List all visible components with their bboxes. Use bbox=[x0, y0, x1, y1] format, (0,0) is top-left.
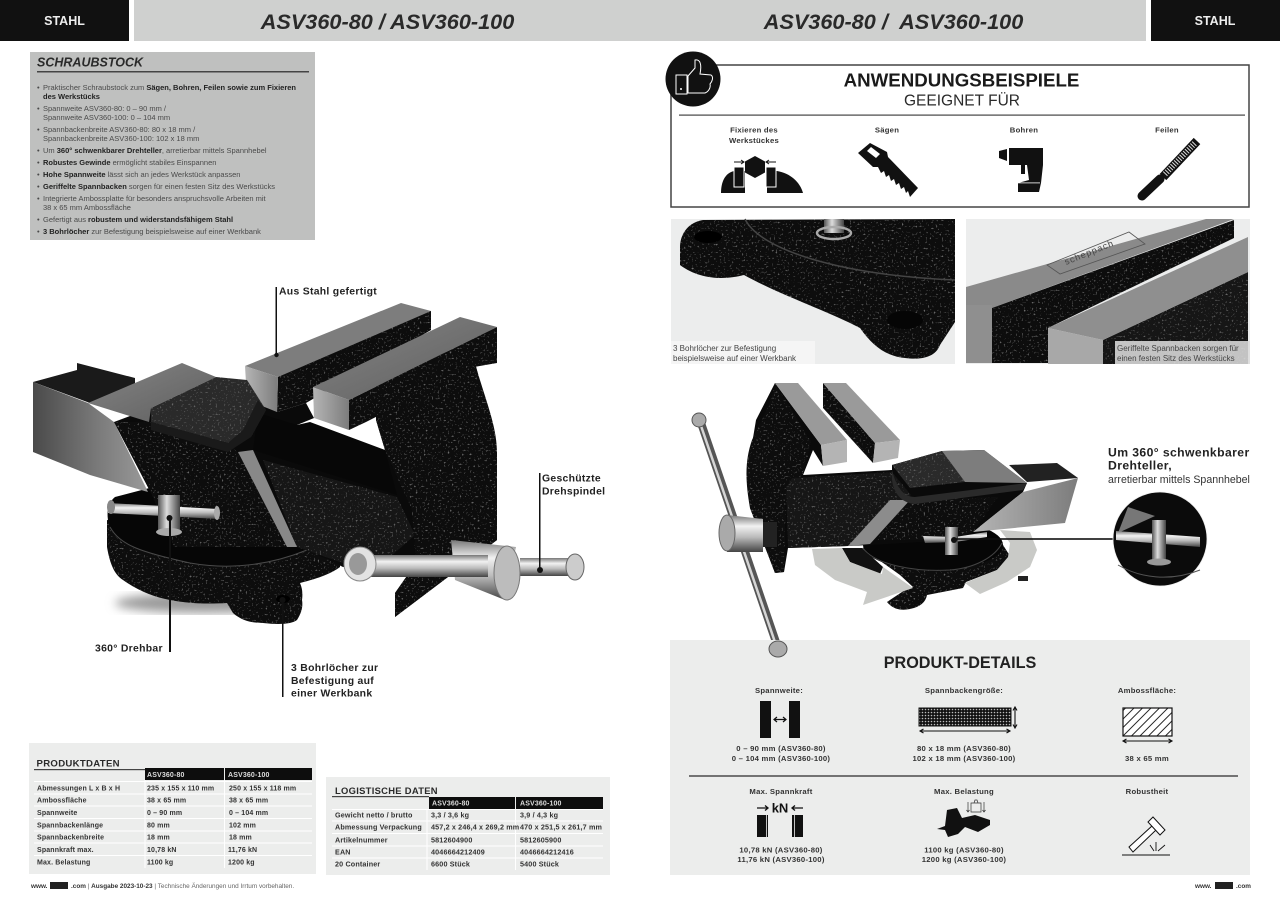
table: Produktdaten: Spannweite bbox=[37, 810, 77, 817]
table: Produktdaten: 38 x 65 mm bbox=[229, 798, 268, 804]
illustration: vise rotated with swivel arrows bbox=[692, 383, 1078, 657]
detail: Max. Spannkraft: 10,78 kN (ASV360-80) bbox=[739, 846, 823, 854]
detail: Spannweite: 0 – 104 mm (ASV360-100) bbox=[732, 754, 830, 763]
photo: serrated jaws close-up: Geriffelte Spannbacken sorgen für bbox=[1117, 344, 1239, 353]
table: Logistische Daten: Abmessung Verpackung bbox=[335, 822, 422, 832]
photo: serrated jaws close-up: scheppach bbox=[1063, 238, 1115, 267]
panel: Schraubstock feature list: • bbox=[37, 194, 40, 203]
detail: Robustheit bbox=[1122, 787, 1170, 855]
panel: Schraubstock feature list: Hohe Spannweite lässt sich an jedes Werkstück anpassen bbox=[43, 170, 240, 179]
solid body backing bbox=[748, 383, 1027, 573]
table: Logistische Daten: 4046664212409 bbox=[431, 848, 485, 856]
detail: Ambossfläche bbox=[1118, 686, 1176, 763]
detail: Spannweite bbox=[732, 686, 830, 763]
detail: Max. Belastung bbox=[922, 787, 1006, 864]
panel: Schraubstock feature list: • bbox=[37, 146, 40, 155]
callout: Geschützte Drehspindel: Drehspindel bbox=[542, 486, 605, 498]
photo: mounting holes close-up bbox=[671, 219, 955, 364]
table: Produktdaten: Abmessungen L x B x H bbox=[37, 786, 120, 792]
table: Logistische Daten: Artikelnummer bbox=[335, 836, 388, 844]
table: Logistische Daten: ASV360-100 bbox=[520, 800, 562, 808]
panel: Schraubstock feature list: • bbox=[37, 158, 40, 167]
detail: Spannbackengröße: 102 x 18 mm (ASV360-100) bbox=[912, 754, 1016, 763]
table: Produktdaten: 250 x 155 x 118 mm bbox=[229, 786, 296, 792]
top banner: STAHL bbox=[1195, 14, 1236, 28]
detail: Max. Spannkraft: kN bbox=[772, 800, 788, 816]
table: Produktdaten: Ambossfläche bbox=[37, 798, 87, 804]
panel: Schraubstock feature list: Spannbackenbreite ASV360-80: 80 x 18 mm / bbox=[43, 125, 196, 134]
table: Produktdaten: Max. Belastung bbox=[37, 860, 90, 866]
table: Logistische Daten: 5812604900 bbox=[431, 836, 472, 844]
icon group: Feilen: Feilen bbox=[1155, 126, 1179, 134]
callout: 360° Drehbar: 360° Drehbar bbox=[95, 644, 163, 654]
table: Produktdaten: 102 mm bbox=[229, 822, 256, 830]
table: Produktdaten: 10,78 kN bbox=[147, 847, 177, 854]
table: Logistische Daten: 4046664212416 bbox=[520, 848, 574, 856]
panel: Schraubstock feature list: Praktischer Schraubstock zum Sägen, Bohren, Feilen sowie zum Fixieren bbox=[43, 83, 296, 92]
callout: Geschützte Drehspindel: Geschützte bbox=[542, 474, 601, 484]
icon group: Fixieren des Werkstückes bbox=[721, 126, 803, 193]
callout: Aus Stahl gefertigt: Aus Stahl gefertigt bbox=[279, 286, 377, 298]
icon group: Fixieren des Werkstückes: Fixieren des bbox=[730, 126, 778, 134]
table: Produktdaten: Spannbackenlänge bbox=[37, 822, 103, 830]
detail: Max. Spannkraft: 11,76 kN (ASV360-100) bbox=[737, 855, 825, 864]
table: Logistische Daten: 20 Container bbox=[335, 860, 380, 868]
panel: Schraubstock feature list: • bbox=[37, 227, 40, 236]
panel: Schraubstock feature list: Spannweite ASV360-80: 0 – 90 mm / bbox=[43, 104, 167, 113]
panel: Schraubstock feature list: • bbox=[37, 83, 40, 92]
photo: mounting holes close-up: beispielsweise auf einer Werkbank bbox=[673, 354, 797, 363]
detail: Max. Spannkraft: Max. Spannkraft bbox=[749, 787, 813, 796]
table: Produktdaten: 1100 kg bbox=[147, 860, 173, 866]
panel: Schraubstock feature list: Integrierte Ambossplatte für besonders anspruchsvolle Arbeiten mit bbox=[43, 194, 267, 203]
callout: swivel magnifier: Drehteller, bbox=[1108, 458, 1172, 472]
callout: Aus Stahl gefertigt bbox=[274, 286, 377, 357]
table: Produktdaten: 0 – 90 mm bbox=[147, 810, 182, 817]
table: Logistische Daten: 3,3 / 3,6 kg bbox=[431, 810, 469, 820]
table: Logistische Daten: Gewicht netto / brutto bbox=[335, 810, 413, 820]
detail: Max. Belastung: Max. Belastung bbox=[934, 787, 994, 796]
panel: Schraubstock feature list: Geriffelte Spannbacken sorgen für einen festen Sitz des Werkstücks bbox=[43, 182, 275, 191]
panel: Schraubstock feature list: • bbox=[37, 215, 40, 224]
solid body backing bbox=[114, 342, 497, 617]
table: Produktdaten bbox=[29, 743, 316, 874]
table: Logistische Daten: EAN bbox=[335, 848, 351, 856]
top banner: STAHL bbox=[44, 14, 85, 28]
photo: mounting holes close-up: 3 Bohrlöcher zur Befestigung bbox=[673, 344, 776, 353]
panel: Schraubstock feature list: Spannbackenbreite ASV360-100: 102 x 18 mm bbox=[43, 134, 199, 143]
icon group: Feilen bbox=[1142, 126, 1197, 196]
table: Produktdaten: 0 – 104 mm bbox=[229, 810, 268, 817]
table: Logistische Daten bbox=[326, 777, 610, 875]
panel: Schraubstock feature list: • bbox=[37, 182, 40, 191]
footer left: www. bbox=[30, 883, 48, 890]
callout: swivel magnifier: Um 360° schwenkbarer bbox=[1108, 446, 1250, 460]
panel: Schraubstock feature list: 3 Bohrlöcher zur Befestigung beispielsweise auf einer Werkbank bbox=[43, 227, 261, 236]
panel: Produkt-Details bbox=[670, 640, 1250, 875]
table: Logistische Daten: 470 x 251,5 x 261,7 mm bbox=[520, 822, 602, 832]
panel: Schraubstock feature list: 38 x 65 mm Ambossfläche bbox=[43, 203, 131, 212]
panel: Schraubstock feature list bbox=[30, 52, 315, 240]
panel: Schraubstock feature list: Robustes Gewinde ermöglicht stabiles Einspannen bbox=[43, 158, 216, 167]
detail: Ambossfläche: 38 x 65 mm bbox=[1125, 754, 1169, 763]
detail: Max. Spannkraft bbox=[737, 787, 825, 864]
top banner: ASV360-80 / ASV360-100 bbox=[763, 9, 1023, 34]
table: Produktdaten: Spannkraft max. bbox=[37, 847, 94, 854]
panel: Schraubstock feature list: • bbox=[37, 125, 40, 134]
icon group: Sägen bbox=[858, 126, 918, 197]
footer right: .com bbox=[1236, 883, 1251, 890]
footer right bbox=[1194, 882, 1251, 890]
panel: Produkt-Details: PRODUKT-DETAILS bbox=[884, 654, 1036, 672]
detail: Spannweite: 0 – 90 mm (ASV360-80) bbox=[736, 744, 826, 753]
detail: Spannbackengröße: Spannbackengröße: bbox=[925, 686, 1003, 695]
table: Produktdaten: 11,76 kN bbox=[228, 847, 257, 854]
panel: Schraubstock feature list: Gefertigt aus robustem und widerstandsfähigem Stahl bbox=[43, 215, 233, 224]
icon group: Bohren: Bohren bbox=[1010, 126, 1038, 134]
icon: thumbs up bbox=[666, 52, 720, 106]
detail: Spannweite: Spannweite: bbox=[755, 686, 803, 695]
callout: swivel magnifier bbox=[954, 446, 1250, 586]
table: Produktdaten: ASV360-80 bbox=[147, 772, 185, 779]
panel: Schraubstock feature list: • bbox=[37, 104, 40, 113]
panel: Schraubstock feature list: des Werkstücks bbox=[43, 92, 100, 101]
callout: 3 Bohrlöcher: einer Werkbank bbox=[291, 688, 372, 700]
icon group: Fixieren des Werkstückes: Werkstückes bbox=[729, 136, 779, 145]
table: Produktdaten: ASV360-100 bbox=[228, 772, 270, 779]
icon group: Sägen: Sägen bbox=[875, 126, 899, 134]
detail: Max. Belastung: 1100 kg (ASV360-80) bbox=[924, 846, 1004, 854]
top banner: ASV360-80 / ASV360-100 bbox=[260, 9, 514, 34]
table: Produktdaten: 38 x 65 mm bbox=[147, 798, 186, 804]
heading: Anwendungsbeispiele: GEEIGNET FÜR bbox=[904, 92, 1020, 110]
table: Logistische Daten: 457,2 x 246,4 x 269,2 mm bbox=[431, 822, 519, 832]
table: Logistische Daten: 3,9 / 4,3 kg bbox=[520, 810, 558, 820]
callout: 360° Drehbar bbox=[95, 515, 172, 654]
panel: Schraubstock feature list: Spannweite ASV360-100: 0 – 104 mm bbox=[43, 113, 170, 122]
callout: swivel magnifier: arretierbar mittels Spannhebel bbox=[1108, 474, 1250, 486]
table: Produktdaten: 235 x 155 x 110 mm bbox=[147, 786, 214, 792]
footer left: .com | Ausgabe 2023-10-23 | Technische Änderungen und Irrtum vorbehalten. bbox=[71, 882, 294, 890]
footer right: www. bbox=[1194, 883, 1212, 890]
panel: Schraubstock feature list: Um 360° schwenkbarer Drehteller, arretierbar mittels Spannhebel bbox=[43, 146, 267, 155]
table: Produktdaten: 80 mm bbox=[147, 822, 170, 830]
callout: 3 Bohrlöcher: 3 Bohrlöcher zur bbox=[291, 663, 378, 674]
table: Logistische Daten: 6600 Stück bbox=[431, 860, 470, 868]
table: Produktdaten: Spannbackenbreite bbox=[37, 834, 104, 842]
table: Logistische Daten: ASV360-80 bbox=[432, 800, 470, 808]
panel: Schraubstock feature list: • bbox=[37, 170, 40, 179]
table: Produktdaten: PRODUKTDATEN bbox=[36, 758, 120, 770]
top banner bbox=[0, 0, 1280, 41]
callout: Geschützte Drehspindel bbox=[537, 473, 605, 573]
table: Logistische Daten: LOGISTISCHE DATEN bbox=[335, 785, 438, 796]
photo: serrated jaws close-up: einen festen Sitz des Werkstücks bbox=[1117, 354, 1235, 363]
detail: Spannbackengröße bbox=[912, 686, 1017, 763]
detail: Max. Belastung: 1200 kg (ASV360-100) bbox=[922, 855, 1006, 864]
illustration: large bench vise bbox=[33, 303, 584, 624]
detail: Ambossfläche: Ambossfläche: bbox=[1118, 686, 1176, 695]
table: Logistische Daten: 5812605900 bbox=[520, 836, 561, 844]
icon group: Bohren bbox=[999, 126, 1043, 192]
photo: serrated jaws close-up bbox=[966, 219, 1250, 364]
table: Produktdaten: 18 mm bbox=[147, 834, 170, 842]
panel: Schraubstock feature list: SCHRAUBSTOCK bbox=[37, 56, 144, 70]
table: Logistische Daten: 5400 Stück bbox=[520, 860, 559, 868]
table: Produktdaten: 1200 kg bbox=[228, 860, 255, 866]
heading: Anwendungsbeispiele bbox=[844, 70, 1079, 110]
callout: 3 Bohrlöcher: Befestigung auf bbox=[291, 676, 374, 687]
callout: 3 Bohrlöcher bbox=[280, 597, 378, 700]
heading: Anwendungsbeispiele: ANWENDUNGSBEISPIELE bbox=[844, 70, 1079, 90]
panel: Anwendungsbeispiele bbox=[666, 52, 1249, 207]
detail: Spannbackengröße: 80 x 18 mm (ASV360-80) bbox=[917, 744, 1011, 753]
detail: Robustheit: Robustheit bbox=[1126, 787, 1169, 796]
table: Produktdaten: 18 mm bbox=[229, 834, 252, 842]
